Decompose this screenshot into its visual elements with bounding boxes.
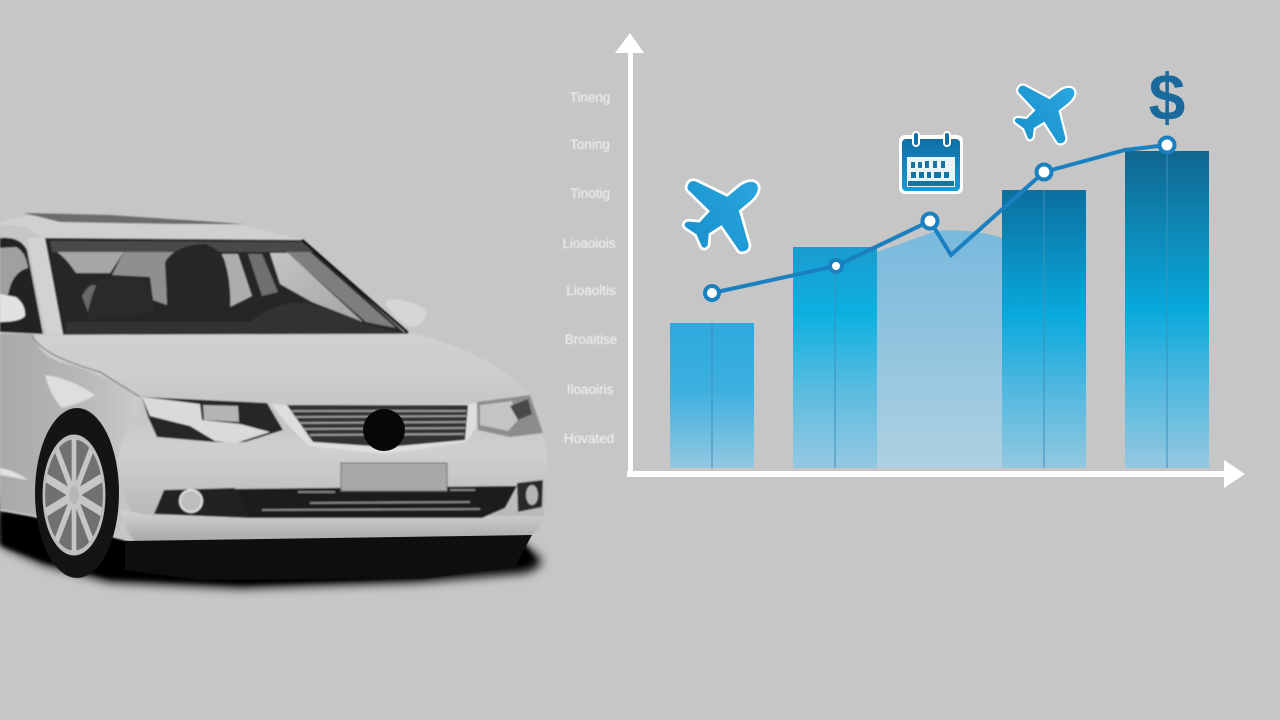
- spokes: [46, 439, 102, 551]
- label 5: Lioaoltis: [566, 283, 616, 298]
- data points: [705, 138, 1174, 300]
- door highlight: [0, 468, 28, 480]
- side panel: [0, 334, 140, 530]
- trend line: [712, 145, 1167, 293]
- right fog lamp housing: [517, 480, 543, 512]
- headlight chrome: [142, 397, 270, 443]
- rim: [44, 437, 104, 553]
- label 3: Tinotig: [570, 186, 610, 201]
- badge circle: [363, 409, 405, 451]
- grille surround: [272, 403, 477, 454]
- label 6: Broaitise: [565, 332, 617, 347]
- calendar rings: [913, 132, 950, 146]
- licence plate: [341, 463, 447, 491]
- label 4: Lioaoiois: [562, 236, 616, 251]
- right windshield gradient: [286, 252, 396, 328]
- fender highlight: [45, 375, 95, 408]
- label 8: Hovated: [564, 431, 614, 446]
- hood crease: [32, 335, 140, 397]
- calendar date panel: [907, 157, 955, 187]
- shadow core: [0, 512, 535, 584]
- label 1: Tineng: [570, 90, 610, 105]
- rear glass: [112, 252, 176, 305]
- bar 4: [1125, 151, 1209, 468]
- bumper: [118, 415, 548, 517]
- rear seat: [82, 276, 154, 320]
- dashboard: [66, 303, 398, 333]
- bar 3: [1002, 190, 1086, 468]
- right mirror: [385, 299, 426, 327]
- wheel arch and tyre: [35, 408, 119, 578]
- a-pillar edge: [302, 240, 408, 333]
- icon: large airplane: [665, 150, 785, 271]
- y axis arrow: [615, 33, 644, 476]
- lower bumper grille: [229, 486, 517, 518]
- left fog lamp: [180, 490, 202, 512]
- point 2: [830, 260, 842, 272]
- left fog lamp housing: [154, 488, 250, 518]
- icon: dollar sign: $: [1149, 60, 1185, 134]
- calendar face: [902, 139, 960, 191]
- calendar frame: [899, 135, 963, 194]
- side window glass: [0, 247, 28, 295]
- icon: small airplane: [1000, 62, 1095, 158]
- windshield: [45, 238, 405, 334]
- label 2: Toning: [570, 137, 610, 152]
- hood: [32, 332, 530, 405]
- roof band: [0, 216, 302, 240]
- under bumper: [125, 535, 532, 580]
- bumper lip: [120, 510, 543, 542]
- point 3: [922, 214, 938, 228]
- point 5: [1160, 138, 1174, 152]
- windshield lower edge: [63, 333, 408, 334]
- point 1: [705, 286, 719, 300]
- point 4: [1036, 164, 1052, 180]
- left headlight: [142, 397, 283, 442]
- headlight lens: [203, 405, 239, 422]
- right headlight: [477, 395, 543, 437]
- y axis labels: [562, 90, 617, 446]
- silver car: [0, 213, 548, 588]
- label 7: Iloaoiris: [567, 382, 614, 397]
- car detail group: [0, 213, 548, 542]
- sunroof strip: [24, 213, 245, 224]
- grille slats: [292, 411, 466, 435]
- alloy wheel: [44, 437, 104, 553]
- right windshield glass: [270, 253, 363, 322]
- rear window patch: [57, 252, 124, 273]
- right headlight chrome: [480, 401, 518, 431]
- icon: calendar: [899, 132, 963, 194]
- left mirror: [0, 294, 25, 322]
- calendar dates: [908, 161, 954, 186]
- bar 2: [793, 247, 877, 468]
- hub: [69, 486, 79, 504]
- lower grille slats: [262, 490, 480, 510]
- pillar: [27, 238, 66, 334]
- x axis arrow: [627, 460, 1245, 488]
- car body: [0, 218, 547, 542]
- right glass strip: [248, 254, 278, 296]
- seat pillar glass: [222, 254, 252, 308]
- windshield top band: [50, 241, 315, 252]
- bar 1: [670, 323, 754, 468]
- grille: [287, 405, 468, 447]
- right fog lamp: [526, 485, 538, 505]
- area fill between bars: [877, 230, 1002, 468]
- headrest highlight: [82, 285, 96, 312]
- front seat: [165, 244, 230, 318]
- ground shadow: [0, 500, 541, 588]
- right headlight core: [510, 399, 532, 420]
- side window: [0, 238, 43, 334]
